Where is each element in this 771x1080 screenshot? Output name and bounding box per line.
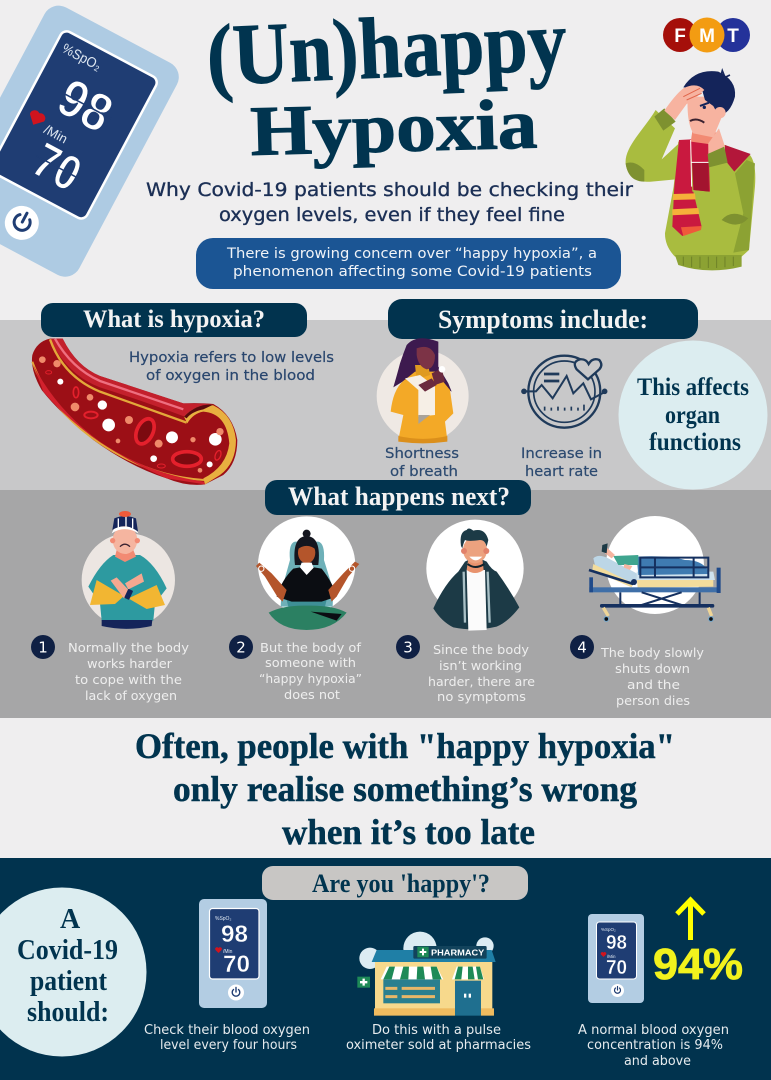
- illustration: step 1 patient: [82, 511, 175, 629]
- text: step 4: [600, 645, 705, 708]
- text: step 4: and the: [627, 677, 680, 692]
- number badge 1: 1: [38, 638, 48, 656]
- illustration: man holding forehead: [626, 71, 755, 270]
- text: step 1: to cope with the: [75, 672, 182, 687]
- number badge 2: 2: [236, 638, 246, 656]
- text: symptom labels: heart rate: [525, 464, 598, 480]
- callout: a covid-19 patient should: A: [60, 904, 81, 935]
- callout: happy hypoxia intro: [196, 238, 621, 289]
- statement: too late warning: Often, people with "happy hypoxia": [135, 726, 675, 766]
- text: step 3: harder, there are: [428, 674, 535, 689]
- icon: pulse oximeter (check level): %SpO₂: [215, 916, 231, 922]
- number badge 2: [229, 635, 253, 659]
- text: step 1: lack of oxygen: [85, 688, 177, 703]
- icon: pulse oximeter (large): 98: [48, 67, 122, 145]
- text: hypoxia definition: of oxygen in the blood: [146, 368, 315, 384]
- illustration: step 4 hospital bed: [589, 516, 721, 621]
- text: hypoxia definition: [129, 350, 334, 384]
- text: step 2: [259, 640, 362, 702]
- text: check level: level every four hours: [160, 1038, 297, 1053]
- text: symptom labels: Shortness: [385, 446, 459, 462]
- heading: symptoms include: [388, 299, 698, 339]
- heading: are you happy: [262, 866, 528, 900]
- stat: 94 percent: 94%: [653, 940, 743, 989]
- icon: pulse oximeter (large): 70: [24, 131, 91, 203]
- title: Hypoxia: [249, 86, 538, 171]
- text: normal concentration: A normal blood oxygen: [578, 1023, 729, 1038]
- callout: this affects organ functions: functions: [649, 429, 741, 456]
- icon: pulse oximeter (normal level): 98: [606, 932, 627, 954]
- subtitle: [146, 179, 633, 226]
- callout: this affects organ functions: organ: [665, 402, 720, 429]
- text: pharmacy: Do this with a pulse: [372, 1023, 501, 1038]
- text: step 4: person dies: [616, 693, 690, 708]
- text: step 4: The body slowly: [600, 645, 705, 660]
- text: step 3: no symptoms: [437, 689, 526, 704]
- number badge 3: 3: [403, 638, 413, 656]
- icon: pulse oximeter (normal level): /Min: [607, 954, 616, 959]
- text: symptom labels: [385, 446, 602, 480]
- icon: pulse oximeter (check level): 70: [223, 951, 250, 978]
- number badge 1: [31, 635, 55, 659]
- text: pharmacy: [346, 1023, 531, 1053]
- icon: pulse oximeter (normal level): [588, 914, 644, 1003]
- illustration: blood vessel: [32, 339, 237, 485]
- heading: symptoms include: Symptoms include:: [438, 305, 648, 334]
- title: [205, 0, 568, 171]
- number badge 4: [570, 635, 594, 659]
- arrow: up: [677, 900, 704, 940]
- subtitle: Why Covid-19 patients should be checking their: [146, 179, 633, 201]
- text: step 1: works harder: [87, 656, 173, 671]
- text: step 1: [68, 640, 190, 703]
- text: normal concentration: and above: [624, 1054, 691, 1069]
- icon: pulse oximeter (large): %SpO₂: [60, 40, 104, 74]
- callout: this affects organ functions: This affects: [637, 374, 749, 401]
- icon: pulse oximeter (check level): [199, 899, 267, 1008]
- icon: pulse oximeter (normal level): 70: [606, 957, 627, 979]
- text: step 2: someone with: [265, 655, 356, 670]
- text: step 4: shuts down: [615, 661, 690, 676]
- callout: happy hypoxia intro: There is growing concern over “happy hypoxia”, a: [226, 246, 597, 262]
- text: normal concentration: concentration is 94%: [587, 1038, 723, 1053]
- icon: pulse oximeter (large): [0, 0, 184, 282]
- icon: pulse oximeter (check level): 98: [221, 921, 248, 948]
- text: check level: Check their blood oxygen: [144, 1023, 310, 1038]
- callout: happy hypoxia intro: phenomenon affecting some Covid-19 patients: [233, 264, 592, 280]
- subtitle: oxygen levels, even if they feel fine: [219, 204, 565, 226]
- icon: pulse oximeter (large): /Min: [41, 122, 70, 146]
- statement: too late warning: when it’s too late: [282, 812, 535, 852]
- heading: what happens next: What happens next?: [288, 482, 510, 511]
- heading: what is hypoxia: [41, 303, 307, 337]
- illustration: woman short of breath: [377, 338, 469, 443]
- callout: this affects organ functions: [618, 340, 768, 490]
- logo: FMT: [663, 18, 750, 52]
- text: step 2: “happy hypoxia”: [259, 671, 362, 686]
- text: check level: [144, 1023, 310, 1053]
- text: step 2: But the body of: [260, 640, 362, 655]
- text: pharmacy: oximeter sold at pharmacies: [346, 1038, 531, 1053]
- statement: too late warning: only realise something’s wrong: [173, 769, 637, 809]
- logo: FMT: M: [699, 26, 715, 47]
- icon: pharmacy: [357, 932, 496, 1016]
- text: hypoxia definition: Hypoxia refers to low levels: [129, 350, 334, 366]
- icon: pharmacy: PHARMACY: [431, 948, 485, 958]
- illustration: step 2 meditating woman: [256, 516, 359, 630]
- statement: too late warning: [135, 726, 675, 852]
- logo: FMT: T: [727, 26, 739, 47]
- callout: a covid-19 patient should: Covid-19: [17, 935, 118, 966]
- heading: are you happy: Are you 'happy'?: [312, 869, 490, 898]
- icon: pulse oximeter (check level): /Min: [223, 949, 233, 955]
- text: step 3: isn’t working: [439, 658, 522, 673]
- icon: pulse oximeter (normal level): %SpO₂: [601, 927, 616, 932]
- heading: what is hypoxia: What is hypoxia?: [83, 306, 265, 333]
- text: symptom labels: Increase in: [521, 446, 602, 462]
- number badge 3: [396, 635, 420, 659]
- callout: a covid-19 patient should: patient: [30, 966, 108, 997]
- number badge 4: 4: [577, 638, 587, 656]
- callout: a covid-19 patient should: should:: [27, 997, 109, 1028]
- text: step 1: Normally the body: [68, 640, 190, 655]
- illustration: step 3 smiling man: [426, 520, 524, 631]
- icon: heart rate monitor: [522, 356, 606, 428]
- text: normal concentration: [578, 1023, 729, 1069]
- text: step 2: does not: [284, 687, 340, 702]
- text: step 3: Since the body: [433, 642, 530, 657]
- logo: FMT: F: [674, 26, 686, 47]
- text: symptom labels: of breath: [390, 464, 458, 480]
- text: step 3: [428, 642, 535, 704]
- callout: a covid-19 patient should: [0, 888, 146, 1056]
